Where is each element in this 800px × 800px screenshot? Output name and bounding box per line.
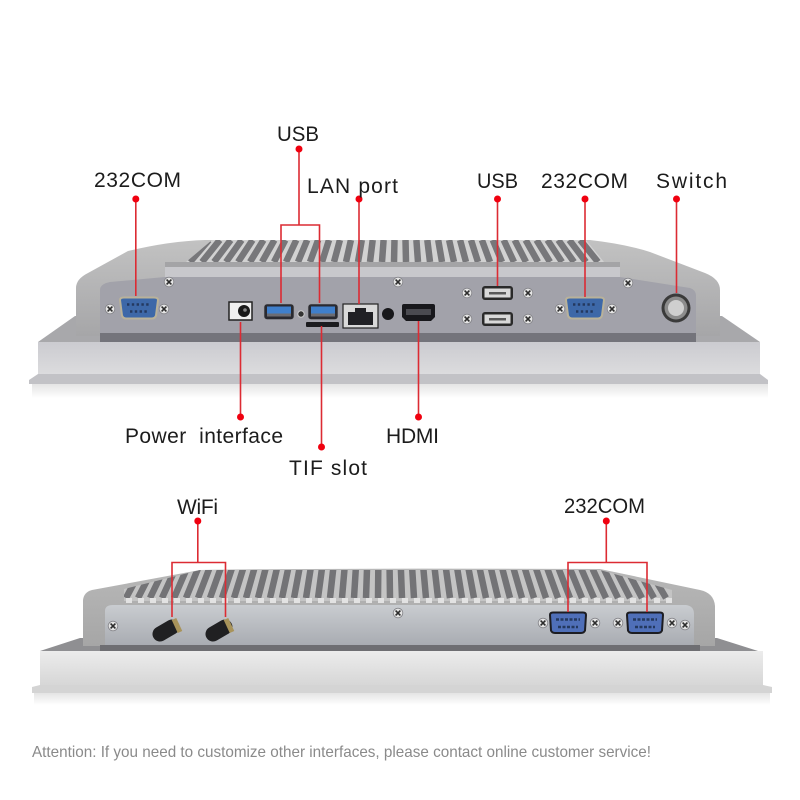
callout: LAN port	[356, 196, 362, 304]
plate screws	[105, 277, 633, 324]
plate screws	[108, 608, 690, 631]
bezel reflection	[34, 693, 770, 705]
connector plate	[105, 605, 694, 645]
light ledge	[165, 267, 620, 277]
port: right serial	[566, 298, 604, 318]
callout: USB bracket	[281, 146, 320, 303]
rear housing	[76, 240, 720, 336]
port: USB 3.0 right	[308, 304, 338, 320]
heat-sink fins	[180, 240, 610, 262]
bezel rear slope	[40, 638, 758, 651]
port: HDMI	[402, 304, 435, 321]
port: serial two	[627, 612, 663, 633]
heat-sink fins	[124, 570, 672, 601]
port: USB 2.0 lower	[482, 312, 513, 326]
shadow strip	[100, 645, 700, 651]
label: USB top: USB	[277, 123, 319, 146]
device: top rear view	[29, 240, 768, 398]
device: bottom rear view	[32, 568, 772, 705]
power switch	[662, 294, 690, 322]
label: bottom 232COM: 232COM	[564, 495, 645, 518]
port: audio	[382, 308, 394, 320]
rear housing	[83, 569, 715, 646]
label: left 232COM: 232COM	[94, 169, 181, 192]
port: USB 2.0 upper	[482, 286, 513, 300]
port: power jack	[229, 302, 252, 320]
callout: left 232COM	[132, 196, 139, 296]
attention note: Attention: If you need to customize other interfaces, please contact online customer service!	[32, 744, 651, 761]
front bezel	[38, 342, 760, 375]
antenna connector right	[213, 619, 232, 634]
bezel lip	[29, 374, 768, 384]
label: right USB: USB	[477, 170, 518, 193]
shadow strip	[100, 333, 696, 342]
bezel reflection	[32, 384, 768, 398]
indicator LED	[298, 311, 304, 317]
port: USB 3.0 left	[264, 304, 294, 320]
callout: right 232COM	[582, 196, 588, 297]
callout: bottom 232COM bracket	[568, 518, 647, 612]
bezel lip	[32, 685, 772, 693]
port: left serial	[120, 298, 158, 318]
callout: switch	[673, 196, 680, 293]
label: right 232COM: 232COM	[541, 170, 628, 193]
antenna connector left	[160, 619, 180, 634]
callout: TIF slot	[318, 326, 325, 450]
band under fins	[165, 262, 620, 267]
port: serial one	[550, 612, 586, 633]
port: LAN	[343, 304, 378, 328]
callout: WiFi bracket	[172, 518, 226, 617]
callout: HDMI	[415, 321, 422, 420]
label: Switch: Switch	[656, 170, 727, 193]
connector plate	[100, 277, 696, 334]
fin base tabs	[126, 598, 672, 603]
port: TF slot	[306, 322, 339, 327]
label: Power interface: Power interface	[125, 425, 283, 448]
callout: power interface	[237, 322, 244, 420]
label: TIF slot: TIF slot	[289, 457, 367, 480]
callout: right USB	[494, 196, 501, 286]
label: LAN port: LAN port	[307, 175, 398, 198]
front bezel	[40, 651, 763, 686]
callout lines and dots	[132, 146, 680, 617]
label: WiFi: WiFi	[177, 496, 218, 519]
label: HDMI: HDMI	[386, 425, 439, 448]
bezel rear slope	[38, 316, 760, 342]
